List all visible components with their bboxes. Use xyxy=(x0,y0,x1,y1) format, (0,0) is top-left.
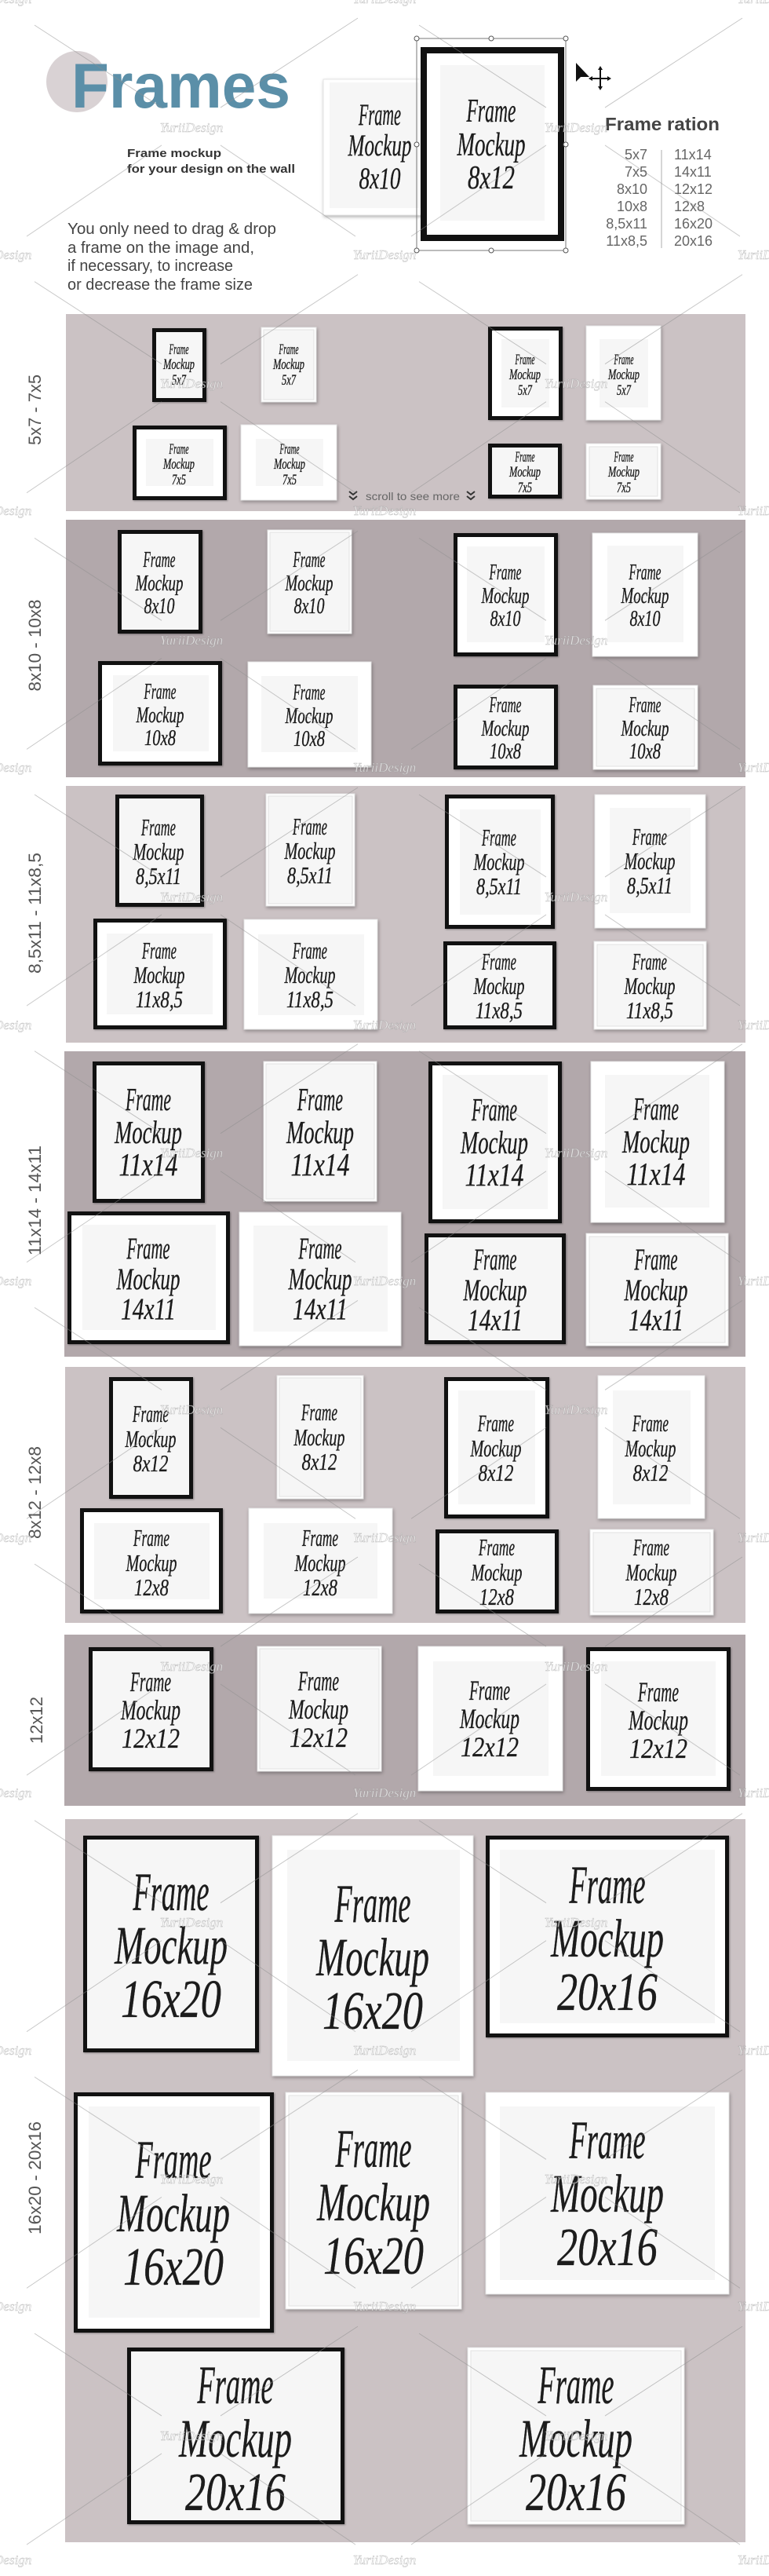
frame: white 8x12 xyxy=(277,1376,363,1499)
frame ratio table: 8x10 xyxy=(617,181,647,197)
frame ratio table: 10x8 xyxy=(617,199,647,214)
frame: white 10x8 xyxy=(248,662,371,767)
frame: white 10x8 small: Frame xyxy=(629,692,661,718)
panel: 8x12 - 12x8 xyxy=(25,1367,745,1623)
frame: black 5x7: Mockup xyxy=(162,356,195,373)
frame: white 5x7 matted: 5x7 xyxy=(617,382,632,399)
frame: black 8,5x11: Frame xyxy=(140,813,176,841)
frame: black 8x10 matted: 8x10 xyxy=(490,606,521,631)
watermarks: YuriiDesign xyxy=(160,1402,223,1417)
frame: white 8,5x11: Frame xyxy=(292,813,327,840)
panel: 11x14 - 14x11 xyxy=(25,1051,745,1357)
frame: white 12x8 small xyxy=(590,1529,713,1615)
frame: white 11x14 xyxy=(264,1061,377,1201)
frame: black 16x20 matted: Frame xyxy=(135,2130,212,2190)
frame: white 11x14: Frame xyxy=(297,1081,343,1117)
frame: black 16x20: Mockup xyxy=(114,1916,228,1975)
frame: white 12x12: Frame xyxy=(297,1665,339,1697)
watermarks: YuriiDesign xyxy=(353,247,416,262)
frame: white 16x20 matted: Mockup xyxy=(315,1927,429,1987)
frame: black 16x20 matted xyxy=(75,2095,272,2330)
frame: white 8x12 matted: 8x12 xyxy=(632,1459,669,1486)
frame: black 14x11 small xyxy=(427,1236,563,1343)
frame: white 14x11 small: 14x11 xyxy=(629,1303,683,1337)
frame ratio table: 5x7 xyxy=(625,147,647,163)
frame: white 8,5x11 matted: Frame xyxy=(632,823,667,850)
frame: black 10x8 small: Mockup xyxy=(481,716,529,741)
frame: black 7x5: 7x5 xyxy=(172,472,186,488)
selection handles xyxy=(414,36,568,253)
frame: black 12x8 small: 12x8 xyxy=(479,1583,514,1610)
watermarks: YuriiDesign xyxy=(353,2043,416,2058)
frame: black 8x10 matted: Frame xyxy=(489,560,522,585)
frame: black 16x20 xyxy=(85,1837,257,2051)
watermarks: YuriiDesign xyxy=(545,2172,607,2187)
frame: white 16x20 matted: 16x20 xyxy=(323,1981,423,2041)
frame: white 14x11 small: Mockup xyxy=(624,1273,687,1307)
frame: white 8,5x11 matted xyxy=(595,795,705,928)
frame: black 5x7 matted xyxy=(490,328,560,418)
frame: white 11x8,5: Mockup xyxy=(284,961,336,988)
panel: 8x10 - 10x8 xyxy=(25,520,745,777)
frame: black 10x8 small: 10x8 xyxy=(490,739,521,764)
frame: black 11x14 matted: Mockup xyxy=(460,1124,528,1160)
watermarks: YuriiDesign xyxy=(353,1273,416,1288)
frame: white 5x7: 5x7 xyxy=(282,372,297,389)
frame: white 8x10 sample xyxy=(323,79,425,215)
subtitle: for your design on the wall xyxy=(127,163,295,176)
watermarks: YuriiDesign xyxy=(353,1018,416,1032)
frame: white 8x10 matted: Mockup xyxy=(621,583,669,608)
frame: black 7x5 small xyxy=(490,446,560,496)
watermarks: YuriiDesign xyxy=(545,1659,607,1674)
frame: black 5x7 matted: Mockup xyxy=(508,367,541,383)
frame: black 8x10: 8x10 xyxy=(144,594,175,619)
frame: black 14x11 xyxy=(69,1214,228,1343)
frame: white 14x11 small xyxy=(586,1233,728,1346)
frame: white 8x10: Mockup xyxy=(285,571,333,596)
frame: black 11x8,5 small: Mockup xyxy=(473,972,524,999)
frame: black 20x16 matted: Frame xyxy=(569,1855,645,1915)
frame: white 12x8 small: Frame xyxy=(632,1533,669,1561)
frame: white 16x20: Frame xyxy=(335,2119,411,2179)
frame: white 8x12: Frame xyxy=(301,1398,337,1426)
frame: white 11x8,5 small: 11x8,5 xyxy=(626,996,673,1024)
frame: white 20x16: 20x16 xyxy=(526,2462,626,2522)
frame: black 20x16 xyxy=(129,2349,342,2522)
watermarks: YuriiDesign xyxy=(353,760,416,775)
watermarks: YuriiDesign xyxy=(353,2552,416,2567)
frame: black 16x20 matted: 16x20 xyxy=(123,2237,224,2296)
frame: white 8x12: 8x12 xyxy=(301,1448,337,1475)
frame: white 12x12 matted: Mockup xyxy=(459,1703,519,1734)
frame: white 5x7 matted: Mockup xyxy=(607,367,640,383)
frame: black 11x14 matted: 11x14 xyxy=(465,1156,524,1193)
frame: white 12x12 matted: Frame xyxy=(468,1675,510,1706)
frame: white 12x8: Frame xyxy=(301,1524,338,1551)
frame: white 11x8,5 small: Frame xyxy=(632,948,667,975)
frame: black 8x10 xyxy=(119,532,201,631)
frame: white 8x12 matted: Frame xyxy=(632,1409,669,1437)
frame: white 8x10 matted: Frame xyxy=(629,560,661,585)
frame: black 10x8 small: Frame xyxy=(489,692,522,718)
watermarks: YuriiDesign xyxy=(160,120,223,135)
scroll hint: scroll to see more xyxy=(366,490,460,502)
frame: black 8,5x11: 8,5x11 xyxy=(136,862,181,890)
icon: move cursor xyxy=(576,63,611,90)
watermarks: YuriiDesign xyxy=(160,633,223,648)
title decoration circle xyxy=(46,51,108,112)
frame: white 16x20: Mockup xyxy=(316,2172,430,2232)
frame ratio table: 7x5 xyxy=(625,164,647,180)
frame: white 5x7 matted xyxy=(586,326,661,420)
instructions text: You only need to drag & drop xyxy=(67,221,276,238)
frame: black 7x5: Mockup xyxy=(162,456,195,473)
frame: black 20x16: 20x16 xyxy=(185,2462,286,2522)
frame ratio heading: Frame ration xyxy=(605,114,720,134)
frame: white 10x8: Frame xyxy=(293,680,326,705)
frame: black 8x12 matted xyxy=(446,1379,548,1517)
frame: black 16x20 matted: Mockup xyxy=(116,2183,230,2243)
frame: white 14x11: Frame xyxy=(298,1232,342,1266)
panel: 12x12 xyxy=(27,1635,745,1806)
frame: black 5x7: Frame xyxy=(169,342,188,358)
frame: white 8x10 xyxy=(268,530,352,634)
frame: white 12x12 matted: 12x12 xyxy=(461,1731,519,1763)
frame: white 14x11 small: Frame xyxy=(634,1243,678,1277)
frame: black 20x16 matted xyxy=(488,1837,727,2035)
frame: black 5x7 matted: 5x7 xyxy=(518,382,533,399)
row label: 16x20 - 20x16 xyxy=(25,2121,45,2234)
watermarks: YuriiDesign xyxy=(160,376,223,391)
frame: black 20x16 matted: 20x16 xyxy=(557,1962,658,2022)
frame: white 12x8 xyxy=(249,1508,392,1613)
frame: white 16x20 matted: Frame xyxy=(334,1874,411,1934)
frame: white 11x8,5 xyxy=(244,919,377,1029)
frame: black 12x12 matted: Frame xyxy=(637,1676,679,1708)
frame: black 11x14: Frame xyxy=(125,1081,171,1117)
watermarks: YuriiDesign xyxy=(160,1659,223,1674)
frame: white 8x10: Frame xyxy=(293,547,326,572)
subtitle: Frame mockup xyxy=(127,147,221,160)
frame: white 7x5: 7x5 xyxy=(282,472,297,488)
frame: black 8,5x11 matted: 8,5x11 xyxy=(476,872,522,900)
frame: white 8,5x11: Mockup xyxy=(284,837,336,864)
frame: black 7x5: Frame xyxy=(169,441,188,458)
frame: black 10x8 xyxy=(100,663,220,763)
frame: white 11x14: 11x14 xyxy=(290,1146,350,1182)
frame: white 7x5 small: 7x5 xyxy=(617,480,631,496)
frame: black 5x7 xyxy=(154,330,204,400)
frame: white 11x14 matted xyxy=(591,1061,724,1222)
frame: white 7x5 small xyxy=(586,444,661,499)
watermarks: YuriiDesign xyxy=(545,120,607,135)
panel: 8,5x11 - 11x8,5 xyxy=(25,786,745,1043)
frame: white 20x16 matted: Frame xyxy=(569,2110,645,2170)
frame: white 8x12 matted: Mockup xyxy=(625,1434,676,1462)
frame ratio table: 8,5x11 xyxy=(606,216,647,232)
frame: white 8,5x11 xyxy=(266,794,355,906)
frame: white 10x8 small xyxy=(593,685,698,769)
frame: black 11x8,5: Mockup xyxy=(133,961,185,988)
frame: selected black 8x12 sample: 8x12 xyxy=(468,160,515,196)
frame: black 7x5 xyxy=(135,427,224,498)
frame: black 8,5x11 xyxy=(118,796,202,904)
watermarks: YuriiDesign xyxy=(545,890,607,904)
frame ratio table xyxy=(606,147,713,249)
frame: white 10x8: 10x8 xyxy=(293,726,325,751)
frame: black 8x12: Mockup xyxy=(125,1425,176,1452)
watermarks: YuriiDesign xyxy=(160,2428,223,2443)
frame: black 11x8,5: Frame xyxy=(141,937,177,964)
frame: black 8,5x11 matted: Mockup xyxy=(473,848,524,875)
frame: white 11x8,5 small xyxy=(594,941,706,1029)
frame: black 8x10 matted xyxy=(455,535,556,655)
frame: black 5x7: 5x7 xyxy=(172,372,187,389)
frame ratio table: 16x20 xyxy=(674,216,713,232)
instructions text: a frame on the image and, xyxy=(67,239,254,257)
title: Frames xyxy=(71,51,290,122)
panel background xyxy=(65,1367,745,1623)
frame: white 8x10 matted: 8x10 xyxy=(629,606,661,631)
frame: white 16x20: 16x20 xyxy=(323,2226,424,2286)
panel background xyxy=(66,520,745,777)
scroll hint xyxy=(349,490,475,502)
frame: white 20x16 matted xyxy=(486,2092,729,2294)
frame: black 7x5 small: Frame xyxy=(515,449,535,466)
row label: 8x12 - 12x8 xyxy=(25,1446,45,1539)
frame: white 8,5x11 matted: 8,5x11 xyxy=(627,871,672,899)
frame: white 11x8,5: 11x8,5 xyxy=(286,985,333,1013)
frame: white 11x14 matted: Mockup xyxy=(621,1124,690,1160)
frame: selected black 8x12 sample: Mockup xyxy=(457,127,526,163)
frame: black 8x10: Frame xyxy=(143,547,176,572)
frame: black 12x8 small: Mockup xyxy=(471,1558,523,1586)
frame: black 14x11 small: 14x11 xyxy=(468,1303,523,1337)
frame: black 5x7 matted: Frame xyxy=(515,352,535,368)
frame: white 8x10: 8x10 xyxy=(293,594,325,619)
frame: black 12x12 matted: Mockup xyxy=(628,1705,688,1736)
frame: white 20x16: Mockup xyxy=(519,2409,632,2468)
frame ratio table: 11x14 xyxy=(674,147,712,163)
frame: black 11x14 matted xyxy=(430,1063,560,1222)
frame: black 8,5x11 matted xyxy=(447,796,552,926)
frame: white 8x12: Mockup xyxy=(293,1423,345,1451)
panel background xyxy=(64,1051,745,1357)
frame: white 20x16 matted: Mockup xyxy=(550,2164,664,2223)
frame: black 10x8 small xyxy=(455,686,556,768)
row label: 8x10 - 10x8 xyxy=(25,599,45,691)
frame: black 20x16: Mockup xyxy=(178,2409,292,2468)
watermarks: YuriiDesign xyxy=(160,1145,223,1160)
watermarks: YuriiDesign xyxy=(545,633,607,648)
frame: white 5x7: Mockup xyxy=(272,356,304,373)
frame: black 12x8: Mockup xyxy=(126,1549,177,1577)
frame: white 14x11: 14x11 xyxy=(293,1292,348,1326)
frame: white 8x10 sample: Mockup xyxy=(348,129,411,163)
watermarks: YuriiDesign xyxy=(160,1915,223,1930)
frame: black 12x12 matted xyxy=(589,1649,728,1789)
frame: black 12x8 small: Frame xyxy=(478,1533,515,1561)
frame: black 8x12 xyxy=(111,1379,191,1496)
instructions text: if necessary, to increase xyxy=(67,258,233,275)
watermarks: YuriiDesign xyxy=(353,503,416,518)
frame: white 8x10 matted xyxy=(592,533,698,656)
watermarks: YuriiDesign xyxy=(545,1402,607,1417)
frame: white 5x7 matted: Frame xyxy=(614,352,634,368)
row label: 12x12 xyxy=(27,1697,46,1744)
frame: black 14x11 small: Mockup xyxy=(463,1273,527,1307)
panel background xyxy=(66,786,745,1043)
watermarks: YuriiDesign xyxy=(545,2428,607,2443)
frame: white 8,5x11: 8,5x11 xyxy=(287,861,333,889)
frame: white 14x11 xyxy=(239,1212,401,1346)
frame: black 12x8: Frame xyxy=(133,1524,169,1551)
frame: white 20x16 xyxy=(468,2348,684,2524)
frame: white 5x7: Frame xyxy=(279,342,298,358)
frame: black 12x8 xyxy=(82,1511,221,1611)
frame: white 16x20 matted xyxy=(272,1836,473,2076)
frame: white 11x8,5: Frame xyxy=(292,937,327,964)
watermarks: YuriiDesign xyxy=(545,1145,607,1160)
frame: black 8x12 matted: 8x12 xyxy=(479,1459,513,1486)
frame ratio table: 12x8 xyxy=(674,199,705,214)
frame: selected black 8x12 sample: Frame xyxy=(466,93,516,130)
frame: black 11x14: Mockup xyxy=(114,1114,182,1150)
panel background xyxy=(65,1819,745,2542)
frame: black 8x12: 8x12 xyxy=(133,1449,168,1477)
frame: white 12x12 xyxy=(257,1646,381,1771)
frame: white 7x5 xyxy=(241,425,337,500)
frame: white 16x20 xyxy=(286,2092,461,2309)
frame ratio table: 20x16 xyxy=(674,233,713,249)
frame: white 10x8 small: 10x8 xyxy=(629,739,661,764)
frame: white 7x5 small: Mockup xyxy=(607,464,640,480)
frame: white 7x5: Mockup xyxy=(273,456,305,473)
watermarks: YuriiDesign xyxy=(353,1785,416,1800)
frame: black 14x11 small: Frame xyxy=(473,1243,516,1277)
frame: black 8x10 matted: Mockup xyxy=(481,583,529,608)
frame: white 7x5 small: Frame xyxy=(614,449,634,466)
panel: 5x7 - 7x5 xyxy=(25,314,745,511)
frame ratio table: 14x11 xyxy=(674,164,712,180)
frame: white 14x11: Mockup xyxy=(288,1262,352,1296)
frame: black 20x16 matted: Mockup xyxy=(550,1909,664,1968)
frame: white 12x12 matted xyxy=(418,1646,563,1791)
frame: black 12x12: 12x12 xyxy=(122,1723,180,1754)
row label: 11x14 - 14x11 xyxy=(25,1145,45,1255)
panel: 16x20 - 20x16 xyxy=(25,1819,745,2542)
frame: black 11x8,5 small: Frame xyxy=(481,948,516,975)
frame: white 8x12 matted xyxy=(598,1376,705,1518)
frame: black 12x12: Frame xyxy=(129,1666,171,1697)
frame: black 11x8,5 small: 11x8,5 xyxy=(476,996,523,1024)
frame: white 8,5x11 matted: Mockup xyxy=(624,847,675,875)
instructions text xyxy=(67,221,276,294)
frame: white 20x16 matted: 20x16 xyxy=(557,2217,658,2277)
frame: white 8x10 sample: 8x10 xyxy=(359,162,400,195)
frame: black 11x14 xyxy=(94,1063,202,1201)
frame: black 10x8: Frame xyxy=(144,679,177,704)
frame ratio table: 11x8,5 xyxy=(606,233,647,249)
frame: white 12x8: 12x8 xyxy=(303,1573,337,1601)
frame: black 12x12: Mockup xyxy=(120,1694,180,1726)
frame: black 12x12 matted: 12x12 xyxy=(629,1733,687,1764)
frame: selected black 8x12 sample xyxy=(424,50,561,238)
frame: white 11x14: Mockup xyxy=(286,1114,354,1150)
frame: black 7x5 small: 7x5 xyxy=(518,480,532,496)
frame: white 7x5: Frame xyxy=(279,441,300,458)
row label: 8,5x11 - 11x8,5 xyxy=(25,853,45,974)
frame: white 12x8 small: 12x8 xyxy=(634,1583,669,1610)
frame: black 8,5x11 matted: Frame xyxy=(481,824,516,851)
frame: black 8x12 matted: Frame xyxy=(477,1409,514,1437)
panel background xyxy=(66,314,745,511)
frame: black 10x8: 10x8 xyxy=(144,725,176,751)
row label: 5x7 - 7x5 xyxy=(25,375,45,445)
frame: black 14x11: Frame xyxy=(126,1232,169,1266)
frame: black 8x12: Frame xyxy=(132,1400,169,1427)
frame: black 12x12 xyxy=(91,1649,212,1770)
frame: black 12x8: 12x8 xyxy=(134,1573,169,1601)
frame: white 12x8: Mockup xyxy=(294,1549,345,1577)
frame: black 7x5 small: Mockup xyxy=(508,464,541,480)
frame: white 12x8 small: Mockup xyxy=(625,1558,676,1586)
frame: black 14x11: 14x11 xyxy=(121,1292,176,1326)
panel background xyxy=(64,1635,745,1806)
watermarks: YuriiDesign xyxy=(545,1915,607,1930)
instructions text: or decrease the frame size xyxy=(67,276,253,294)
watermarks: YuriiDesign xyxy=(353,2299,416,2314)
watermarks: YuriiDesign xyxy=(545,376,607,391)
frame: white 5x7 xyxy=(261,327,316,402)
frame: white 20x16: Frame xyxy=(538,2355,614,2415)
subtitle xyxy=(127,147,295,176)
watermarks: YuriiDesign xyxy=(160,2172,223,2187)
frame: black 11x8,5: 11x8,5 xyxy=(136,985,183,1013)
frame: black 16x20: 16x20 xyxy=(121,1969,221,2029)
frame: black 11x14 matted: Frame xyxy=(471,1091,517,1127)
watermarks: YuriiDesign xyxy=(353,1530,416,1545)
frame: black 11x8,5 xyxy=(96,920,224,1027)
frame: white 11x14 matted: 11x14 xyxy=(626,1156,686,1192)
frame: black 12x8 small xyxy=(438,1531,557,1611)
frame: black 14x11: Mockup xyxy=(116,1262,180,1296)
frame: white 11x8,5 small: Mockup xyxy=(624,972,675,999)
frame: white 12x12: Mockup xyxy=(288,1694,348,1725)
frame: white 12x12: 12x12 xyxy=(290,1722,348,1753)
frame: white 10x8 small: Mockup xyxy=(621,716,669,741)
frame: black 11x8,5 small xyxy=(446,944,554,1027)
frame: white 10x8: Mockup xyxy=(285,703,333,729)
frame: black 8x12 matted: Mockup xyxy=(470,1434,521,1462)
frame: black 20x16: Frame xyxy=(197,2355,273,2415)
frame: black 8,5x11: Mockup xyxy=(133,838,184,865)
frame: black 11x14: 11x14 xyxy=(119,1146,177,1182)
frame ratio table: 12x12 xyxy=(674,181,713,197)
watermarks: YuriiDesign xyxy=(160,890,223,904)
header xyxy=(46,36,720,294)
frame: black 8x10: Mockup xyxy=(135,571,184,596)
frame: white 11x14 matted: Frame xyxy=(632,1091,679,1127)
frame: black 10x8: Mockup xyxy=(136,703,184,728)
frame: white 8x10 sample: Frame xyxy=(358,98,401,132)
frame: black 16x20: Frame xyxy=(133,1862,209,1922)
